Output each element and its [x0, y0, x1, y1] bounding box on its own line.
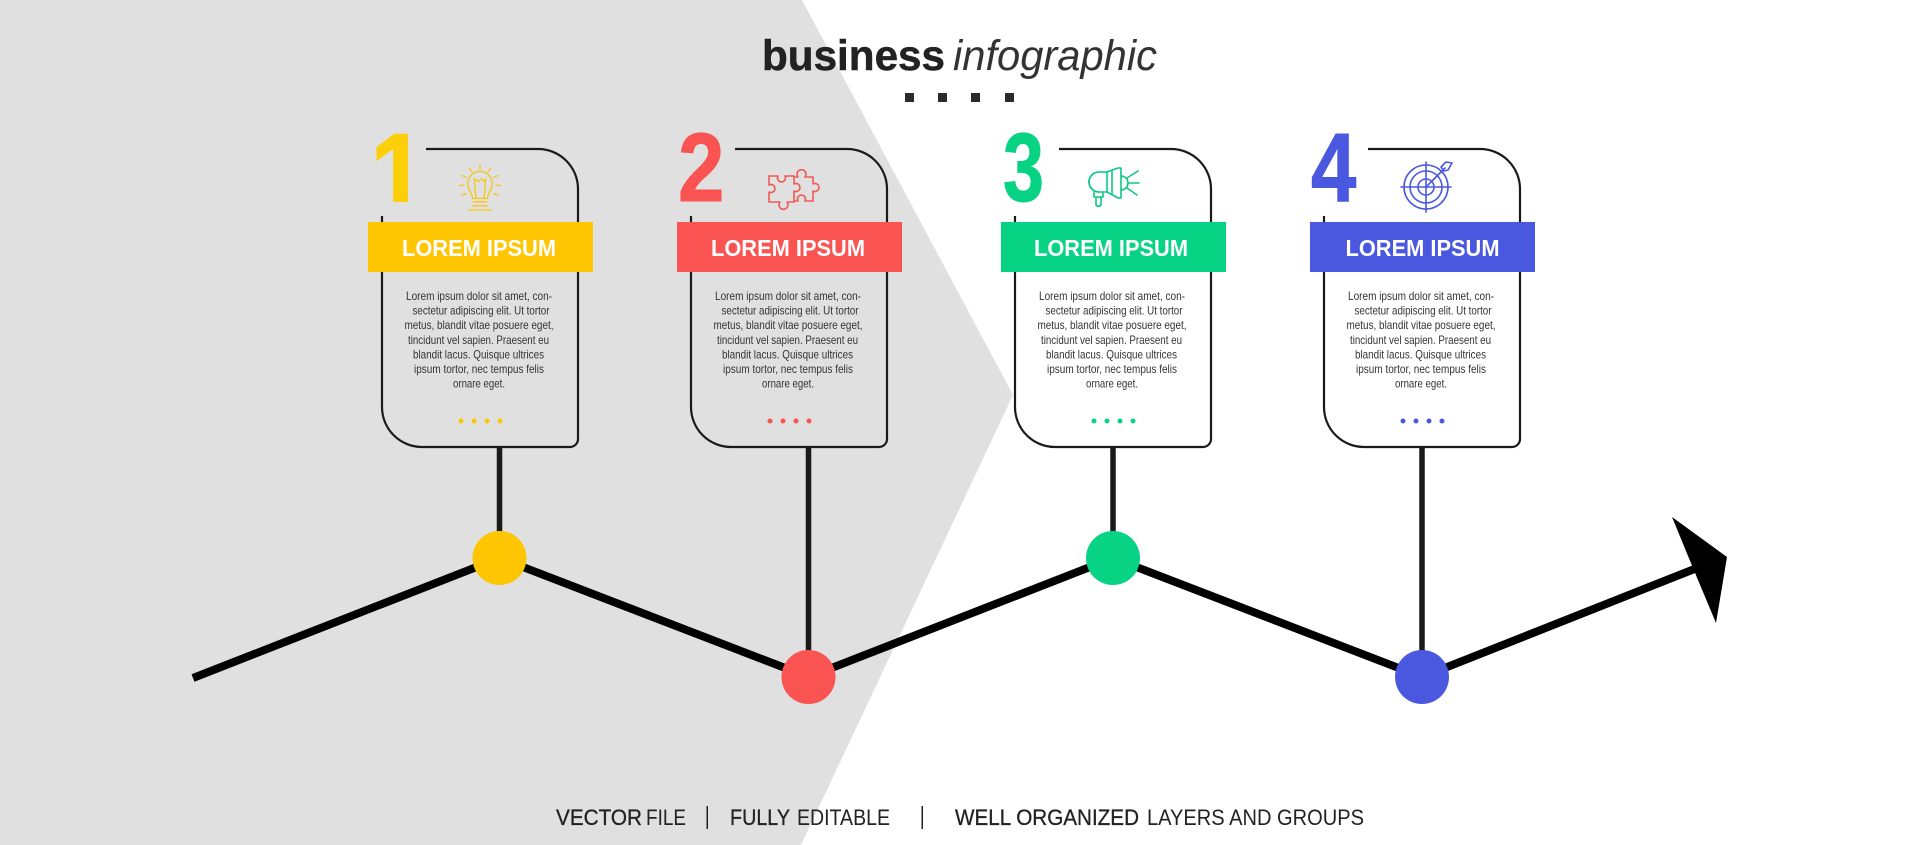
dots 3: [1092, 418, 1136, 424]
body text 4: sectetur adipiscing elit. Ut tortor: [1354, 304, 1492, 318]
body text 3: tincidunt vel sapien. Praesent eu: [1041, 333, 1182, 347]
title: [762, 32, 1157, 80]
body text 2: Lorem ipsum dolor sit amet, con-: [715, 289, 861, 303]
body text 4: metus, blandit vitae posuere eget,: [1346, 318, 1496, 332]
footer caption: WELL ORGANIZED: [955, 805, 1139, 830]
heading bar 4: [1310, 222, 1535, 272]
body text 4: ipsum tortor, nec tempus felis: [1356, 362, 1486, 376]
footer caption: VECTOR: [556, 805, 642, 830]
card outline 4: [1324, 149, 1520, 447]
body text 2: tincidunt vel sapien. Praesent eu: [717, 333, 858, 347]
footer caption: EDITABLE: [797, 805, 890, 830]
body text 1: ornare eget.: [453, 377, 505, 391]
heading 4: LOREM IPSUM: [1346, 235, 1500, 261]
body text 3: sectetur adipiscing elit. Ut tortor: [1046, 304, 1183, 318]
background: grey arrow shape: [0, 0, 1013, 845]
body text 2: blandit lacus. Quisque ultrices: [722, 347, 853, 361]
body text 3: [1038, 289, 1186, 391]
timeline zigzag line: [193, 558, 1697, 678]
number 1: 1: [370, 109, 426, 242]
body text 4: tincidunt vel sapien. Praesent eu: [1350, 333, 1491, 347]
body text 3: ornare eget.: [1086, 377, 1138, 391]
title: business: [762, 32, 945, 80]
body text 2: metus, blandit vitae posuere eget,: [714, 318, 862, 332]
icon: megaphone: [1089, 168, 1139, 206]
icon: light bulb: [460, 165, 500, 210]
body text 3: blandit lacus. Quisque ultrices: [1046, 347, 1177, 361]
body text 4: blandit lacus. Quisque ultrices: [1355, 347, 1486, 361]
card outline 3: [1015, 149, 1211, 447]
body text 3: Lorem ipsum dolor sit amet, con-: [1039, 289, 1185, 303]
card outline 1: [382, 149, 578, 447]
panel: step 4: [1310, 113, 1535, 447]
dots 4: [1400, 418, 1444, 424]
number 2: 2: [678, 114, 724, 222]
dots 1: [458, 418, 502, 424]
footer caption: [556, 805, 1364, 830]
panel: step 2: [677, 114, 902, 447]
icon: puzzle: [769, 170, 819, 209]
timeline node 1: [472, 531, 526, 585]
body text 3: metus, blandit vitae posuere eget,: [1038, 318, 1186, 332]
heading bar 2: [677, 222, 902, 272]
body text 1: ipsum tortor, nec tempus felis: [414, 362, 544, 376]
stems connecting cards to timeline: [500, 447, 1422, 677]
card outline 2: [691, 149, 887, 447]
panel: step 1: [368, 109, 593, 447]
body text 1: tincidunt vel sapien. Praesent eu: [408, 333, 549, 347]
panel: step 3: [1001, 114, 1226, 447]
footer caption: FULLY: [730, 805, 790, 830]
icon: target: [1401, 162, 1452, 212]
heading 3: LOREM IPSUM: [1034, 235, 1188, 261]
timeline node 4: [1395, 650, 1449, 704]
footer caption: FILE: [646, 805, 686, 830]
body text 4: Lorem ipsum dolor sit amet, con-: [1348, 289, 1494, 303]
title decorative squares: [905, 93, 1014, 102]
arrow head: [1672, 517, 1727, 623]
body text 1: metus, blandit vitae posuere eget,: [404, 318, 554, 332]
body text 2: sectetur adipiscing elit. Ut tortor: [722, 304, 859, 318]
body text 1: Lorem ipsum dolor sit amet, con-: [406, 289, 552, 303]
body text 4: ornare eget.: [1395, 377, 1447, 391]
body text 2: ornare eget.: [762, 377, 814, 391]
number 4: 4: [1311, 113, 1356, 222]
title: infographic: [953, 32, 1157, 80]
footer caption: LAYERS AND GROUPS: [1147, 805, 1364, 830]
body text 1: [404, 289, 554, 391]
body text 1: sectetur adipiscing elit. Ut tortor: [412, 304, 550, 318]
body text 3: ipsum tortor, nec tempus felis: [1047, 362, 1177, 376]
body text 2: [714, 289, 862, 391]
body text 4: [1346, 289, 1496, 391]
heading 2: LOREM IPSUM: [711, 235, 865, 261]
timeline node 3: [1086, 531, 1140, 585]
heading 1: LOREM IPSUM: [402, 235, 556, 261]
body text 2: ipsum tortor, nec tempus felis: [723, 362, 853, 376]
heading bar 1: [368, 222, 593, 272]
dots 2: [768, 418, 812, 424]
timeline node 2: [782, 650, 836, 704]
body text 1: blandit lacus. Quisque ultrices: [413, 347, 544, 361]
heading bar 3: [1001, 222, 1226, 272]
number 3: 3: [1003, 114, 1044, 222]
